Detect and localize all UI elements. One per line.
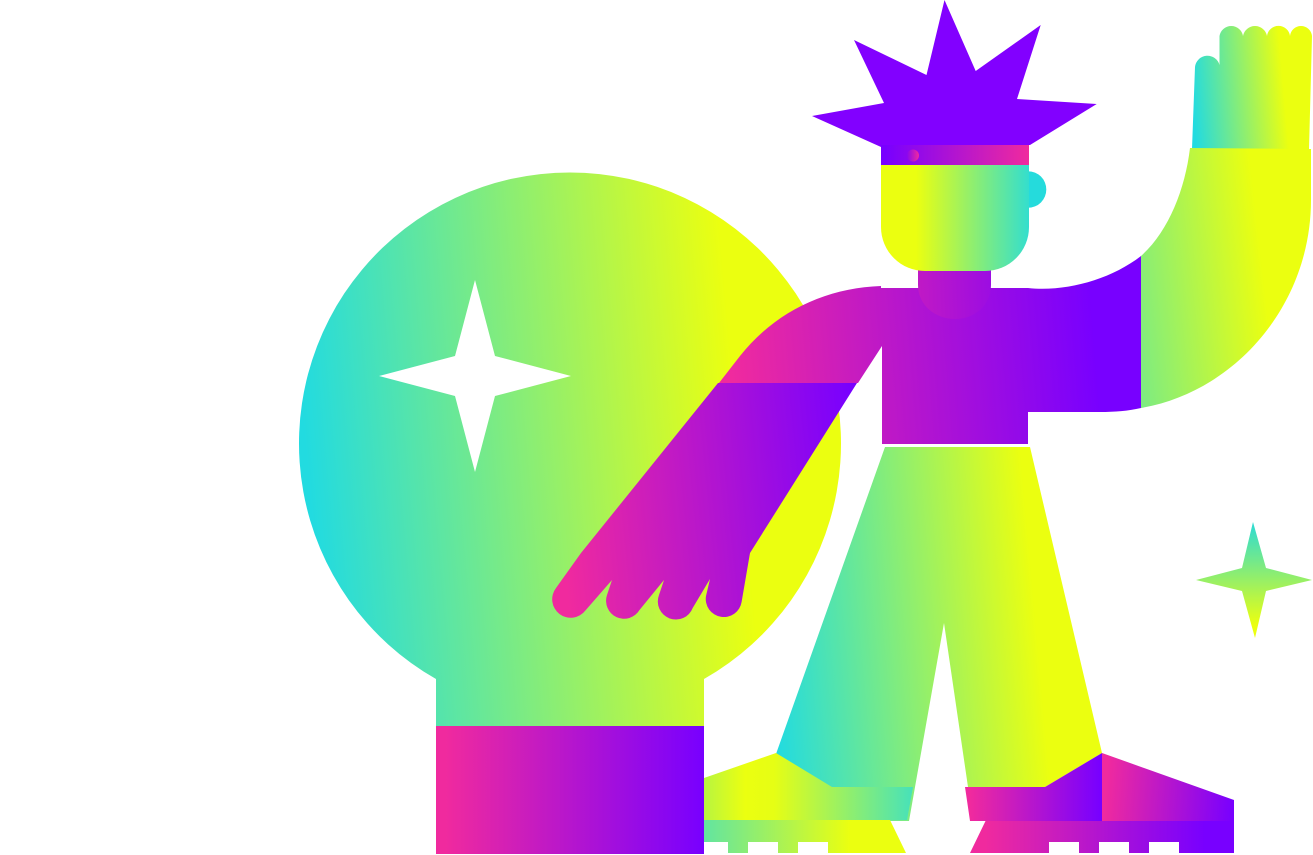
bulb base xyxy=(436,726,704,854)
eye xyxy=(907,150,919,162)
small sparkle xyxy=(1196,522,1312,638)
ear xyxy=(1010,171,1046,208)
sparkle on bulb xyxy=(379,280,571,472)
head xyxy=(812,0,1097,271)
figure xyxy=(552,0,1312,853)
right shoe xyxy=(965,753,1234,853)
torso and upper arm xyxy=(719,256,1141,444)
legs xyxy=(776,447,1102,821)
light bulb xyxy=(299,172,841,854)
right shoe heel xyxy=(965,753,1102,821)
raised hand xyxy=(1192,26,1312,150)
left shoe sole xyxy=(704,820,906,853)
neck xyxy=(918,270,991,319)
headband xyxy=(881,145,1029,165)
right shoe sole xyxy=(970,820,1234,853)
left shoe xyxy=(704,753,913,853)
raised forearm xyxy=(1141,148,1311,408)
face xyxy=(881,165,1029,271)
left shoe upper xyxy=(704,753,913,820)
right shoe toe xyxy=(1102,753,1234,821)
bulb glass xyxy=(299,172,841,727)
lower arm and hand xyxy=(552,383,857,620)
hair xyxy=(812,0,1097,147)
